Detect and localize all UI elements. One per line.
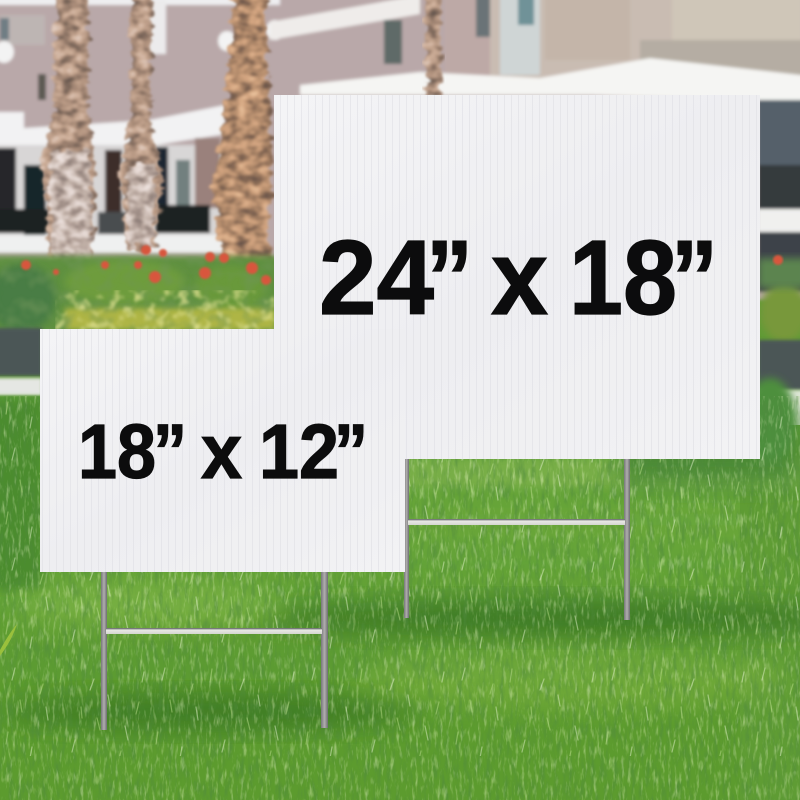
label: 18 x 12: 12 bbox=[259, 409, 339, 495]
label: 24 x 18: 18 bbox=[569, 219, 677, 337]
label: 24 x 18 bbox=[319, 219, 718, 337]
label: 18 x 12: ” bbox=[334, 409, 368, 495]
background: lawn bbox=[0, 378, 800, 800]
label: 24 x 18: 24 bbox=[319, 219, 434, 337]
label: 24 x 18: ” bbox=[671, 219, 718, 337]
label: 18 x 12: ” bbox=[153, 409, 187, 495]
upper right facade bbox=[270, 0, 420, 40]
label: 18 x 12: x bbox=[201, 409, 242, 495]
white floor slab bbox=[0, 105, 225, 146]
large sign: 24 x 18 bbox=[274, 95, 760, 459]
label: 18 x 12: 18 bbox=[78, 409, 156, 495]
label: 18 x 12 bbox=[78, 409, 368, 495]
foreground leaf bbox=[0, 624, 17, 656]
background: palm trunks bbox=[42, 0, 442, 275]
label: 24 x 18: ” bbox=[426, 219, 473, 337]
label: 24 x 18: x bbox=[491, 219, 548, 337]
background: apartment building bbox=[0, 0, 800, 300]
small sign: 18 x 12 bbox=[40, 329, 405, 572]
background: flower bed bbox=[0, 245, 800, 430]
large sign stakes bbox=[404, 458, 630, 620]
small sign stakes bbox=[101, 570, 328, 730]
